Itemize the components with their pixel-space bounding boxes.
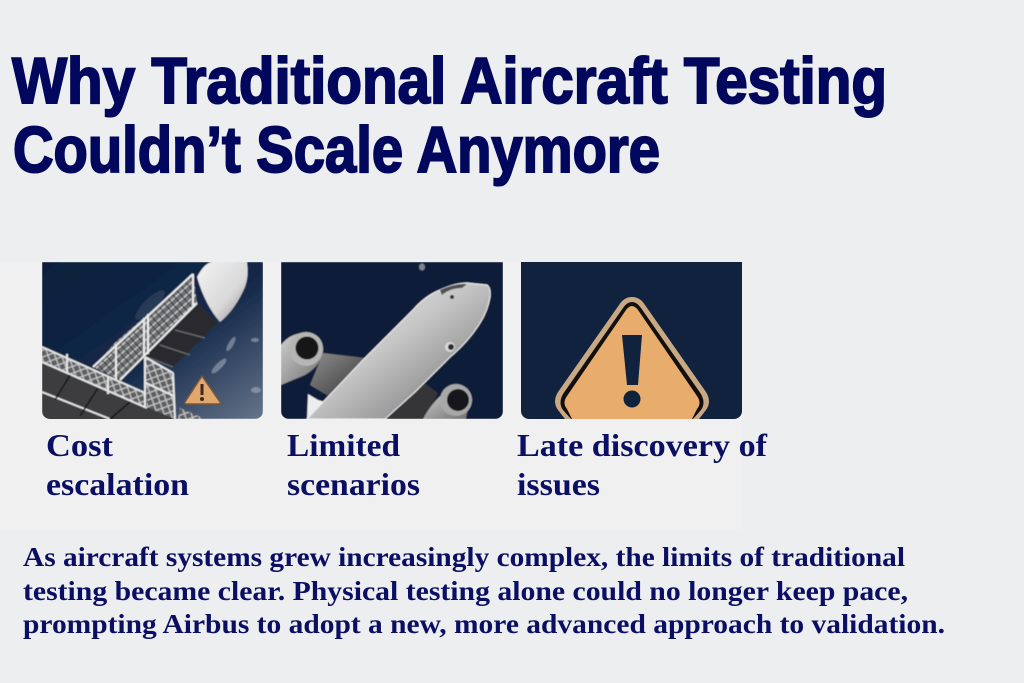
label: scenarios: [287, 466, 420, 502]
panel: limited scenarios: [281, 262, 503, 502]
label: [517, 427, 767, 502]
body text: testing became clear. Physical testing alone could no longer keep pace,: [23, 575, 908, 606]
title: Why Traditional Aircraft Testing: [12, 44, 887, 117]
panel: late discovery of issues: [517, 262, 767, 502]
label: Late discovery of: [517, 427, 767, 463]
title: Couldn’t Scale Anymore: [13, 113, 660, 186]
image: airliner from below: [281, 262, 503, 419]
label: [287, 427, 420, 502]
panel: cards backdrop: [0, 262, 742, 530]
label: Limited: [287, 427, 400, 463]
icon: small warning triangle: [185, 376, 220, 404]
panel: cost escalation: [42, 262, 263, 502]
body text: [23, 541, 945, 639]
image: aircraft in test rig: [42, 262, 263, 430]
label: Cost: [46, 427, 113, 463]
image: warning sign: [521, 262, 742, 419]
title: [12, 44, 887, 186]
label: escalation: [46, 466, 189, 502]
label: [46, 427, 189, 502]
icon: large warning triangle: [555, 297, 709, 419]
body text: prompting Airbus to adopt a new, more advanced approach to validation.: [23, 608, 945, 639]
body text: As aircraft systems grew increasingly complex, the limits of traditional: [23, 541, 905, 572]
label: issues: [517, 466, 600, 502]
